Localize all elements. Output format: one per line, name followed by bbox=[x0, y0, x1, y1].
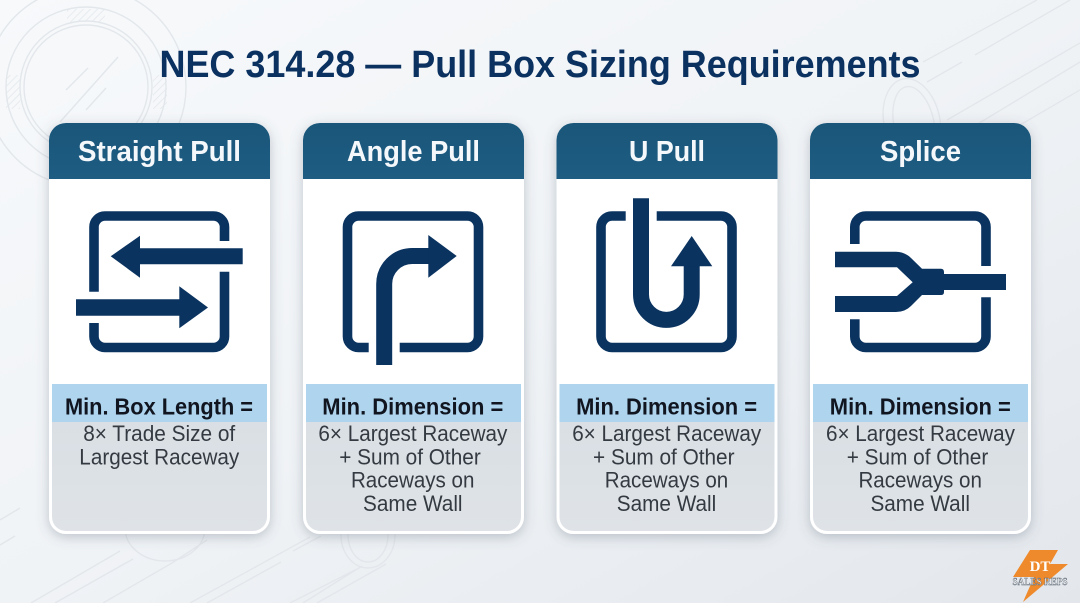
formula text: U pull: Same Wall bbox=[617, 491, 716, 516]
formula text: angle pull bbox=[306, 421, 521, 531]
formula band: minimum dimension bbox=[560, 384, 774, 422]
icon: straight pull box with opposing arrows bbox=[76, 216, 243, 348]
icon: angle pull box with bent arrow bbox=[348, 216, 478, 365]
formula text: U pull: 6× Largest Raceway bbox=[572, 421, 761, 446]
formula text: splice: Raceways on bbox=[858, 468, 982, 492]
formula band: minimum dimension bbox=[813, 384, 1028, 422]
header: U pull: U Pull bbox=[629, 136, 705, 168]
header: straight pull: Straight Pull bbox=[78, 136, 241, 168]
formula text: straight pull: Largest Raceway bbox=[79, 444, 239, 470]
formula text: angle pull: 6× Largest Raceway bbox=[318, 421, 507, 446]
header: angle pull bbox=[303, 123, 524, 179]
formula text: splice bbox=[813, 421, 1028, 531]
formula text: U pull: + Sum of Other bbox=[593, 444, 735, 470]
formula band: minimum dimension: Min. Dimension = bbox=[322, 394, 503, 420]
formula text: U pull bbox=[560, 421, 774, 531]
formula text: angle pull: + Sum of Other bbox=[339, 444, 481, 470]
formula band: minimum dimension: Min. Dimension = bbox=[830, 394, 1011, 420]
title: NEC 314.28 — Pull Box Sizing Requirements bbox=[160, 44, 920, 86]
formula text: straight pull bbox=[52, 421, 267, 531]
header: U pull bbox=[556, 123, 778, 179]
formula band: minimum dimension bbox=[306, 384, 521, 422]
formula band: minimum dimension: Min. Dimension = bbox=[576, 394, 757, 420]
icon: U pull box with U-turn arrow bbox=[601, 198, 732, 348]
formula text: straight pull: 8× Trade Size of bbox=[83, 421, 236, 446]
panel: angle pull bbox=[303, 123, 524, 534]
panel: splice bbox=[810, 123, 1031, 534]
header: splice: Splice bbox=[880, 136, 961, 168]
formula text: angle pull: Same Wall bbox=[363, 491, 463, 516]
formula text: splice: 6× Largest Raceway bbox=[826, 421, 1015, 446]
formula band: minimum box length: Min. Box Length = bbox=[65, 394, 253, 420]
panel: straight pull bbox=[49, 123, 270, 534]
logo: DT Sales Reps lightning bolt: SALES REPS bbox=[1012, 577, 1068, 588]
formula band: minimum box length bbox=[52, 384, 267, 422]
header: straight pull bbox=[49, 123, 270, 179]
header: angle pull: Angle Pull bbox=[347, 136, 480, 168]
icon: splice box with merging conductors bbox=[835, 216, 1006, 348]
formula text: angle pull: Raceways on bbox=[351, 468, 474, 492]
formula text: U pull: Raceways on bbox=[605, 468, 728, 492]
formula text: splice: + Sum of Other bbox=[847, 444, 988, 470]
formula text: splice: Same Wall bbox=[870, 491, 970, 516]
logo: DT Sales Reps lightning bolt: DT bbox=[1030, 559, 1050, 575]
header: splice bbox=[810, 123, 1031, 179]
panel: U pull bbox=[556, 123, 778, 534]
logo: DT Sales Reps lightning bolt bbox=[1012, 550, 1068, 602]
